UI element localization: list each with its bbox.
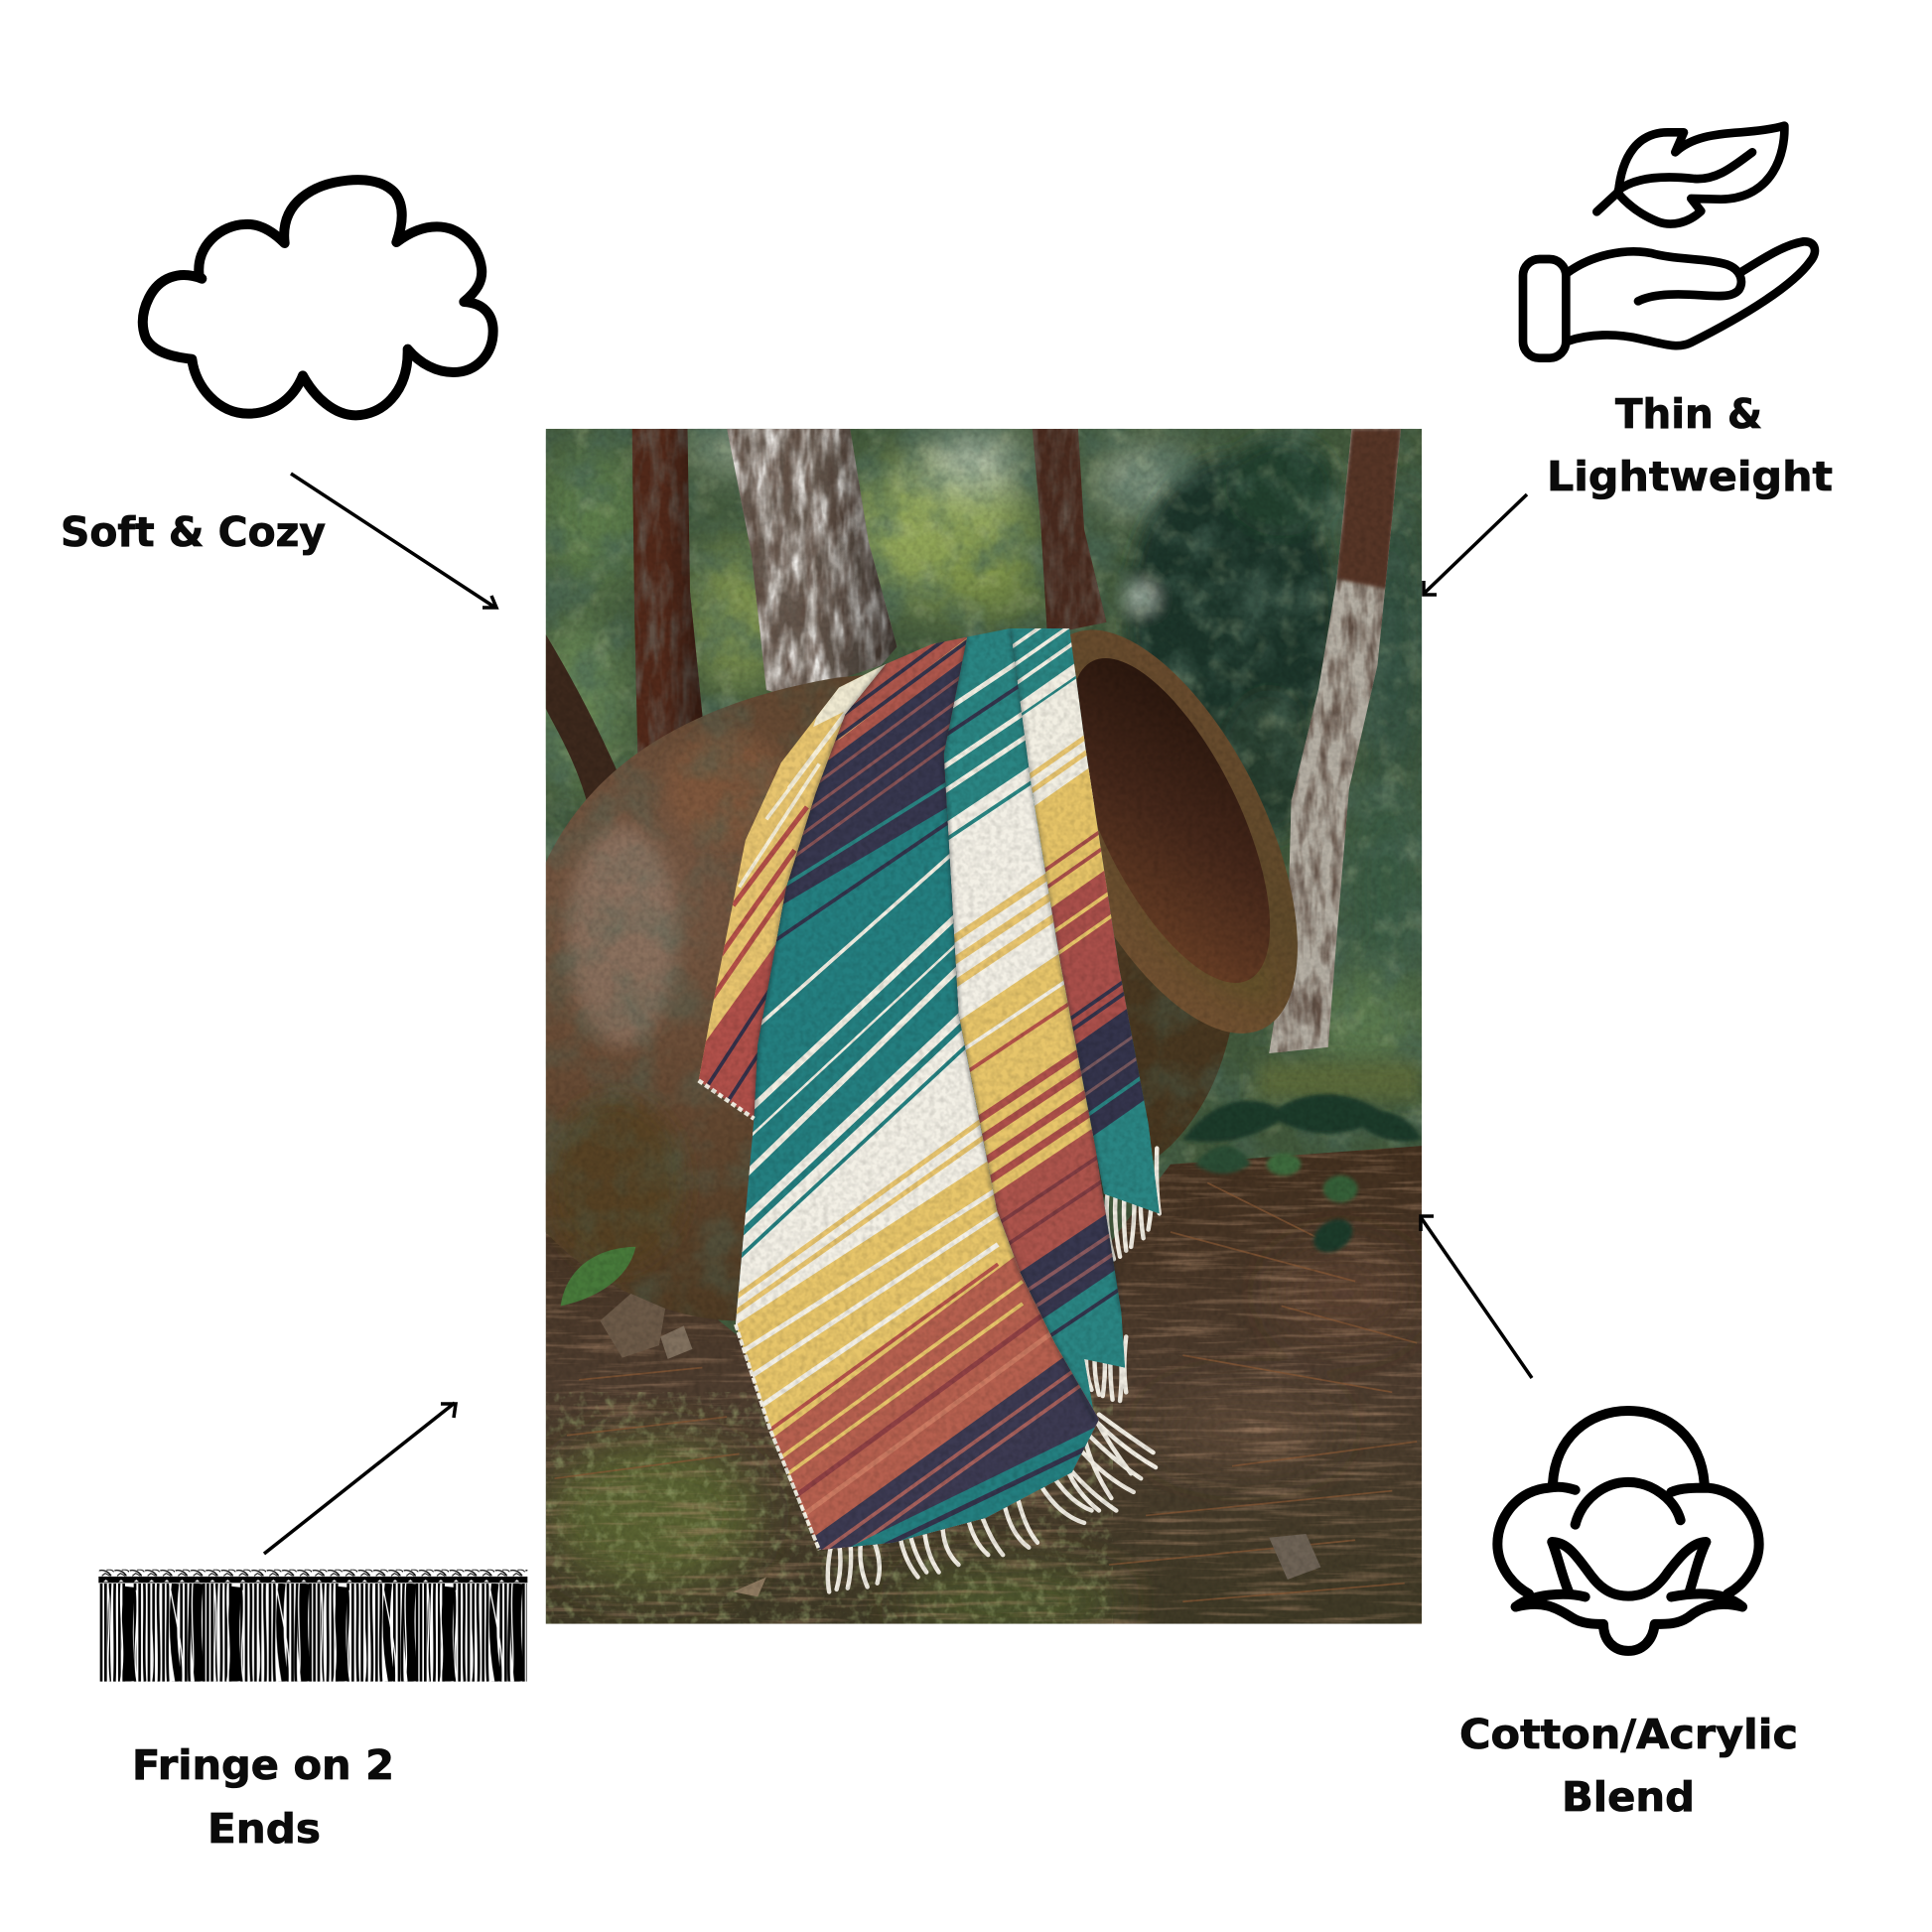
icon: cloud <box>143 180 493 415</box>
film grain <box>546 429 1422 1624</box>
dark rear trunk <box>1033 429 1106 629</box>
panel: left fold <box>699 664 886 1117</box>
blanket <box>684 527 1182 1639</box>
white-washed right trunk <box>1269 429 1401 1053</box>
label: Soft & Cozy: Soft & Cozy <box>61 508 326 556</box>
fold shadows and hems <box>699 628 1121 1550</box>
bark trunk <box>727 429 897 696</box>
panel: front layer <box>721 543 1128 1639</box>
icon: leaf above open hand <box>1523 126 1815 358</box>
small plant and rocks <box>561 1247 1320 1596</box>
panel: middle layer <box>943 628 1125 1408</box>
jar body <box>546 653 1232 1320</box>
photo: striped blanket draped over a clay jar in a forest <box>536 425 1430 1639</box>
label: Cotton/Acrylic Blend: Cotton/Acrylic <box>1459 1711 1798 1758</box>
hand <box>1523 241 1815 358</box>
fringe: middle layer <box>1086 1336 1126 1401</box>
panel: right layer <box>1011 627 1160 1213</box>
arrow: Fringe to photo <box>264 1403 456 1554</box>
clay jar <box>546 629 1298 1320</box>
arrow: Soft & Cozy to photo <box>291 474 496 608</box>
arrow: Cotton/Acrylic Blend to photo <box>1421 1216 1532 1378</box>
label: Fringe on 2 Ends: Ends <box>207 1805 321 1853</box>
label: Thin & Lightweight: Lightweight <box>1547 453 1833 500</box>
jar rim <box>1070 629 1298 1034</box>
reddish trunk <box>631 429 703 753</box>
icon: fringe trim <box>98 1570 527 1682</box>
forest backdrop <box>536 426 1430 1624</box>
low foliage <box>1182 1094 1422 1259</box>
fringe: right layer <box>1107 1149 1160 1259</box>
tree trunks <box>546 425 1405 1059</box>
arrow: Thin & Lightweight to photo <box>1424 494 1527 595</box>
label: Thin & Lightweight <box>1547 390 1833 500</box>
label: Thin & Lightweight: Thin & <box>1615 390 1762 438</box>
label: Cotton/Acrylic Blend <box>1459 1711 1798 1821</box>
leaning branch <box>546 634 617 800</box>
label: Fringe on 2 Ends: Fringe on 2 <box>132 1741 394 1789</box>
jar mouth interior <box>1076 658 1270 983</box>
forest floor <box>546 1062 1422 1632</box>
label: Cotton/Acrylic Blend: Blend <box>1562 1773 1695 1821</box>
fringe: front layer <box>828 1415 1156 1591</box>
label: Fringe on 2 Ends <box>132 1741 394 1853</box>
leaf <box>1596 126 1784 224</box>
icon: cotton boll <box>1497 1411 1759 1651</box>
